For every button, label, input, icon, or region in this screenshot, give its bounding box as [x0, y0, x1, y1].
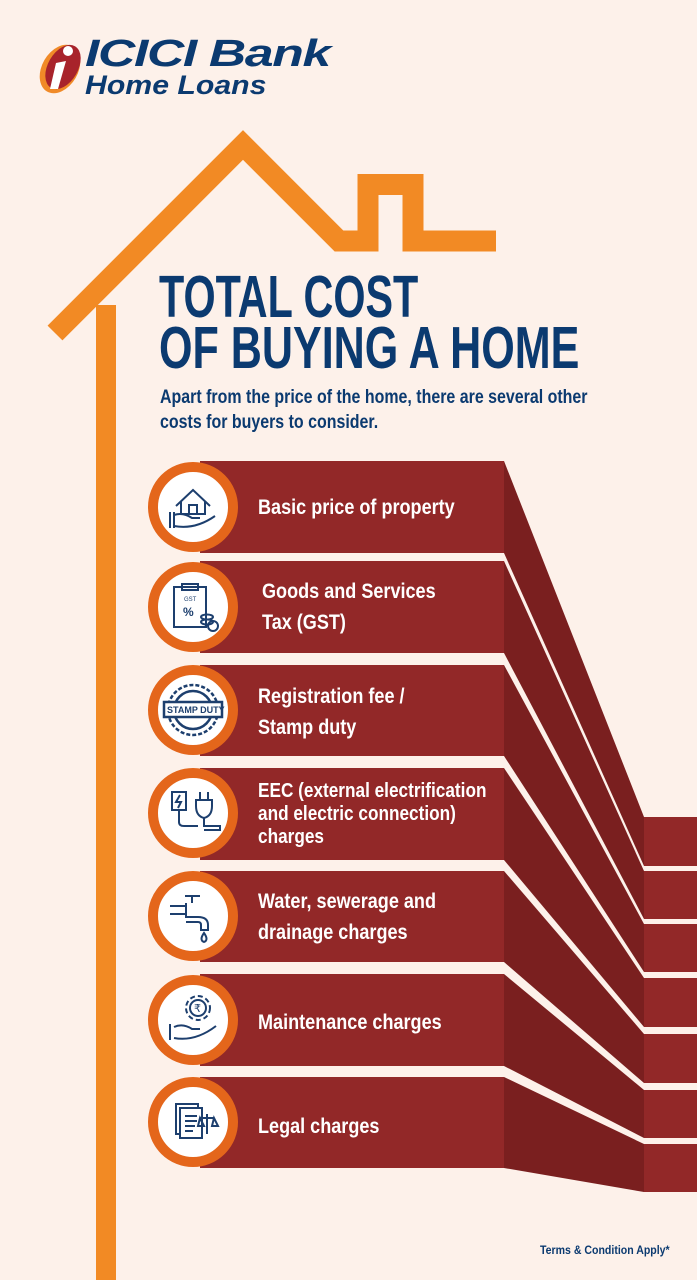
icon: GST clipboard: GST: [184, 597, 197, 603]
house outline: [55, 145, 496, 1280]
icon: GST clipboard: %: [183, 605, 194, 619]
footer: terms: Terms & Condition Apply*: [540, 1243, 670, 1257]
item: basic price: Basic price of property: [258, 496, 455, 519]
item: legal: Legal charges: [258, 1115, 379, 1138]
icon: rupee gear in hand: ₹: [194, 1002, 201, 1015]
subtitle: costs for buyers to consider.: [160, 412, 378, 433]
item: GST: Tax (GST): [262, 611, 346, 634]
icon: legal documents: [176, 1104, 218, 1138]
icon: rupee gear in hand: [170, 996, 216, 1040]
logo: [40, 33, 334, 100]
logo text: ICICI Bank: [85, 33, 330, 75]
icon: house in hand: [170, 490, 215, 528]
item: GST: Goods and Services: [262, 580, 436, 603]
item: registration: Registration fee /: [258, 685, 405, 708]
item: EEC: [258, 780, 486, 848]
item: maintenance: Maintenance charges: [258, 1011, 442, 1034]
item: water: Water, sewerage and: [258, 890, 436, 913]
item: EEC: and electric connection): [258, 803, 456, 825]
icon: water tap: [170, 896, 208, 942]
icon: ICICI i mark: [40, 44, 81, 94]
logo: Home Loans: [85, 70, 266, 100]
bars: right end blocks: [644, 817, 697, 1192]
icon circles: [153, 467, 233, 1162]
title: OF BUYING A HOME: [159, 315, 579, 381]
item: GST: [262, 580, 436, 634]
item: EEC: EEC (external electrification: [258, 780, 486, 802]
item: registration: [258, 685, 405, 739]
title: TOTAL COST: [159, 264, 418, 330]
subtitle: Apart from the price of the home, there are several other: [160, 387, 587, 408]
bars: front faces: [200, 461, 504, 1168]
item: water: drainage charges: [258, 921, 408, 944]
icon: stamp duty: STAMP DUTY: [167, 705, 225, 715]
icon: electric plug: [172, 792, 220, 830]
bars: side faces: [504, 461, 644, 1192]
item: EEC: charges: [258, 826, 324, 848]
icon: GST clipboard: [174, 584, 218, 631]
item: water: [258, 890, 436, 944]
icon: stamp duty: [164, 685, 225, 735]
item: registration: Stamp duty: [258, 716, 356, 739]
title: [159, 264, 579, 381]
subtitle: [160, 387, 588, 433]
